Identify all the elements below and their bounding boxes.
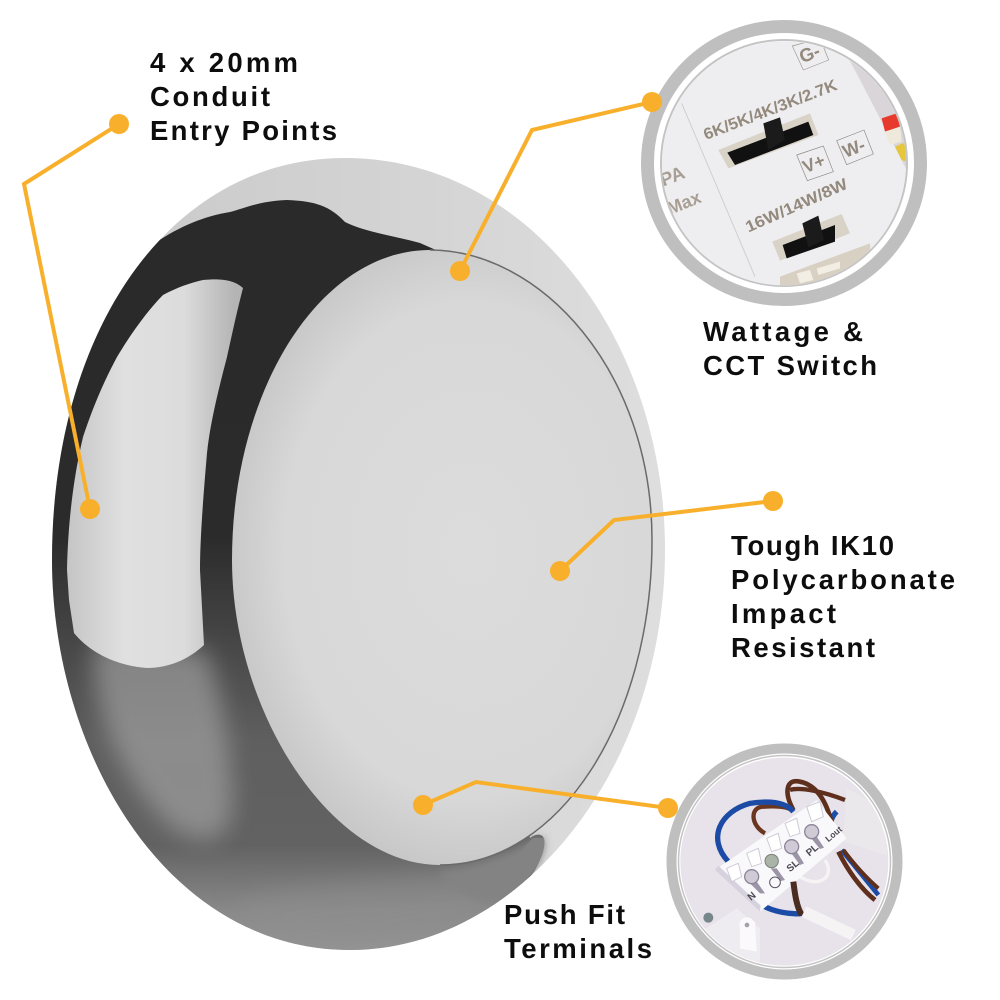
- label: wattage and CCT switch: [703, 316, 877, 381]
- switch photograph: W-: [840, 135, 868, 162]
- label: wattage and CCT switch: Wattage &: [703, 316, 863, 347]
- switch photograph: PA: [657, 162, 688, 190]
- photo inset: wattage and CCT switch: [640, 26, 933, 300]
- side window highlight: [67, 279, 243, 668]
- switch photograph: G-: [796, 40, 823, 67]
- terminal block: [715, 800, 847, 912]
- leader: conduit entry points: [24, 114, 129, 519]
- label: tough IK10 polycarbonate: Polycarbonate: [731, 564, 955, 595]
- label: conduit entry points: Conduit: [150, 81, 270, 112]
- leader: push fit terminals: [413, 782, 678, 818]
- switch photograph: V+: [800, 150, 828, 177]
- label: push fit terminals: Terminals: [504, 933, 652, 964]
- terminal photograph: PL: [804, 842, 821, 859]
- product: round bulkhead light: [20, 158, 665, 980]
- label: push fit terminals: Push Fit: [504, 899, 625, 930]
- terminal photograph: Lout: [823, 824, 844, 844]
- lens edge shadow line: [430, 250, 652, 865]
- label: tough IK10 polycarbonate: Impact: [731, 598, 836, 629]
- switch photograph: Max: [664, 187, 704, 219]
- dark reflective body: [20, 200, 544, 980]
- inset outer ring: [648, 26, 920, 300]
- label: conduit entry points: [150, 47, 337, 146]
- inset outer ring: [672, 748, 898, 974]
- label: wattage and CCT switch: CCT Switch: [703, 350, 877, 381]
- outer chrome rim: [52, 158, 665, 950]
- label: tough IK10 polycarbonate: Resistant: [731, 632, 875, 663]
- switch photograph: 16W/14W/8W: [743, 176, 851, 236]
- terminal photograph: [677, 755, 890, 968]
- photo inset: push fit terminals: [672, 748, 898, 974]
- label: conduit entry points: Entry Points: [150, 115, 337, 146]
- label: push fit terminals: [504, 899, 652, 964]
- label: conduit entry points: 4 x 20mm: [150, 47, 298, 78]
- label: tough IK10 polycarbonate: [731, 530, 955, 663]
- terminal photograph: SL: [785, 858, 802, 875]
- switch photograph: 6K/5K/4K/3K/2.7K: [701, 77, 840, 144]
- leader: polycarbonate lens: [550, 491, 783, 581]
- label: tough IK10 polycarbonate: Tough IK10: [731, 530, 894, 561]
- leader: wattage and CCT switch: [450, 92, 662, 281]
- switch photograph: [662, 42, 906, 286]
- terminal photograph: N: [746, 890, 758, 903]
- frosted polycarbonate lens: [232, 250, 652, 865]
